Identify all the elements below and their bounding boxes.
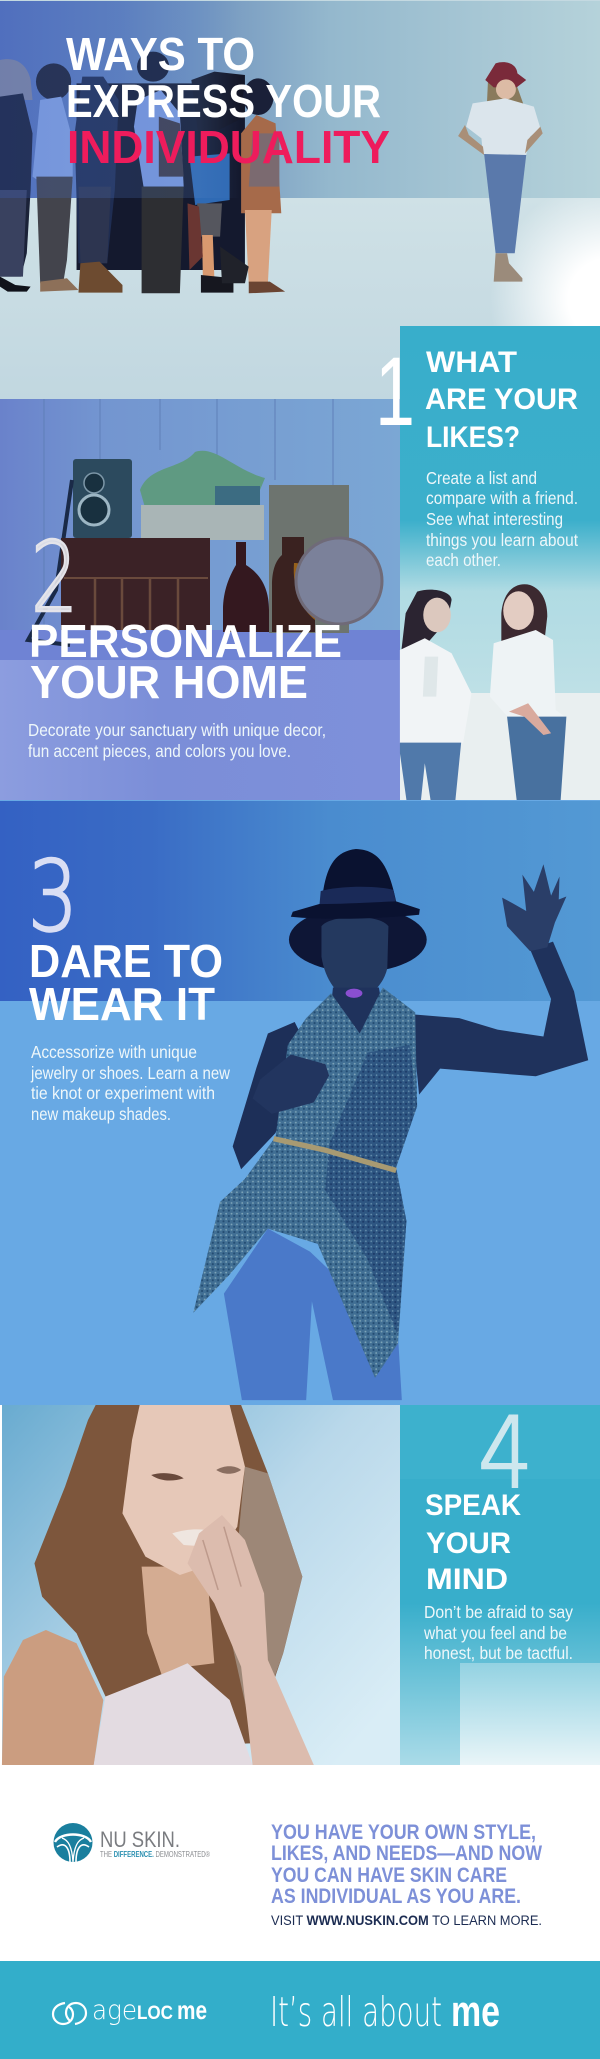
- heading: personalize your home: PERSONALIZE: [29, 615, 342, 667]
- heading: what are your likes: WHAT: [426, 346, 517, 379]
- tagline: me: [451, 1987, 500, 2036]
- heading: dare to wear it: WEAR IT: [29, 978, 215, 1030]
- body text: step 2: Decorate your sanctuary with unique decor,: [28, 720, 326, 740]
- number 1: 1: [375, 337, 415, 446]
- heading: what are your likes: [425, 346, 578, 454]
- logo: ageLOC me: LOC: [137, 2003, 173, 2024]
- text: closing statement: YOU CAN HAVE SKIN CARE: [271, 1864, 507, 1887]
- text: closing statement: YOU HAVE YOUR OWN STYLE,: [271, 1821, 536, 1844]
- heading: dare to wear it: [29, 935, 223, 1030]
- number 4: 4: [478, 1397, 533, 1510]
- logo: Nu Skin: NU SKIN.: [100, 1827, 180, 1852]
- body text: step 1: Create a list and: [426, 468, 537, 488]
- heading: speak your mind: SPEAK: [425, 1489, 521, 1522]
- logo: ageLOC me: [53, 1995, 207, 2026]
- body text: step 1: things you learn about: [426, 530, 578, 550]
- panel: hero: [0, 0, 600, 400]
- photo: crowd of people: [0, 52, 285, 293]
- heading: personalize your home: [29, 615, 342, 708]
- photo: woman in hat and sequin vest: [193, 849, 588, 1400]
- panel: step 3 dare to wear it: [0, 800, 600, 1405]
- panel: footer teal band: [0, 1961, 600, 2059]
- body text: step 1: compare with a friend.: [426, 488, 578, 508]
- logo: Nu Skin: THE DIFFERENCE. DEMONSTRATED®: [100, 1850, 210, 1859]
- photo: two women laughing: [400, 584, 567, 800]
- body text: step 3: [30, 1042, 230, 1124]
- panel: footer white: [0, 1765, 600, 1961]
- body text: step 4: honest, but be tactful.: [424, 1643, 573, 1663]
- heading: main title: WAYS TO: [66, 28, 255, 80]
- body text: step 4: Don’t be afraid to say: [424, 1602, 573, 1622]
- text: closing statement: AS INDIVIDUAL AS YOU ARE.: [271, 1885, 521, 1908]
- body text: step 1: [426, 468, 578, 570]
- body text: step 4: what you feel and be: [423, 1623, 567, 1643]
- heading: what are your likes: LIKES?: [426, 421, 520, 454]
- panel: step 2 personalize your home: [0, 399, 400, 800]
- photo: camera, plants, shelf and bottles: [28, 451, 382, 645]
- panel: step 1 what are your likes: [375, 326, 600, 800]
- photo: woman laughing: [2, 1405, 314, 1765]
- heading: what are your likes: ARE YOUR: [425, 383, 578, 416]
- text: closing statement: [271, 1821, 542, 1928]
- logo: ageLOC me: age: [92, 1995, 137, 2026]
- heading: speak your mind: MIND: [426, 1563, 508, 1596]
- photo: woman in hat: [458, 62, 543, 282]
- body text: step 2: [28, 720, 326, 761]
- heading: main title: [66, 28, 390, 173]
- body text: step 2: fun accent pieces, and colors you love.: [28, 741, 291, 761]
- heading: personalize your home: YOUR HOME: [30, 656, 308, 708]
- panel: step 4 speak your mind: [2, 1397, 600, 1765]
- heading: speak your mind: YOUR: [426, 1527, 511, 1560]
- heading: main title: INDIVIDUALITY: [67, 121, 390, 173]
- logo: Nu Skin: [54, 1823, 210, 1862]
- body text: step 3: Accessorize with unique: [31, 1042, 197, 1062]
- body text: step 3: new makeup shades.: [31, 1104, 171, 1124]
- body text: step 3: jewelry or shoes. Learn a new: [30, 1063, 230, 1083]
- body text: step 1: each other.: [426, 550, 501, 570]
- tagline: It’s all about: [270, 1988, 442, 2036]
- text: closing statement: VISIT WWW.NUSKIN.COM TO LEARN MORE.: [271, 1913, 542, 1928]
- body text: step 1: See what interesting: [426, 509, 563, 529]
- number 2: 2: [31, 521, 78, 634]
- body text: step 4: [423, 1602, 573, 1663]
- heading: speak your mind: [425, 1489, 521, 1596]
- number 3: 3: [28, 840, 78, 953]
- text: closing statement: LIKES, AND NEEDS—AND NOW: [271, 1842, 542, 1865]
- body text: step 3: tie knot or experiment with: [31, 1083, 215, 1103]
- heading: main title: EXPRESS YOUR: [66, 75, 381, 127]
- logo: ageLOC me: me: [177, 1995, 207, 2025]
- heading: dare to wear it: DARE TO: [29, 935, 223, 987]
